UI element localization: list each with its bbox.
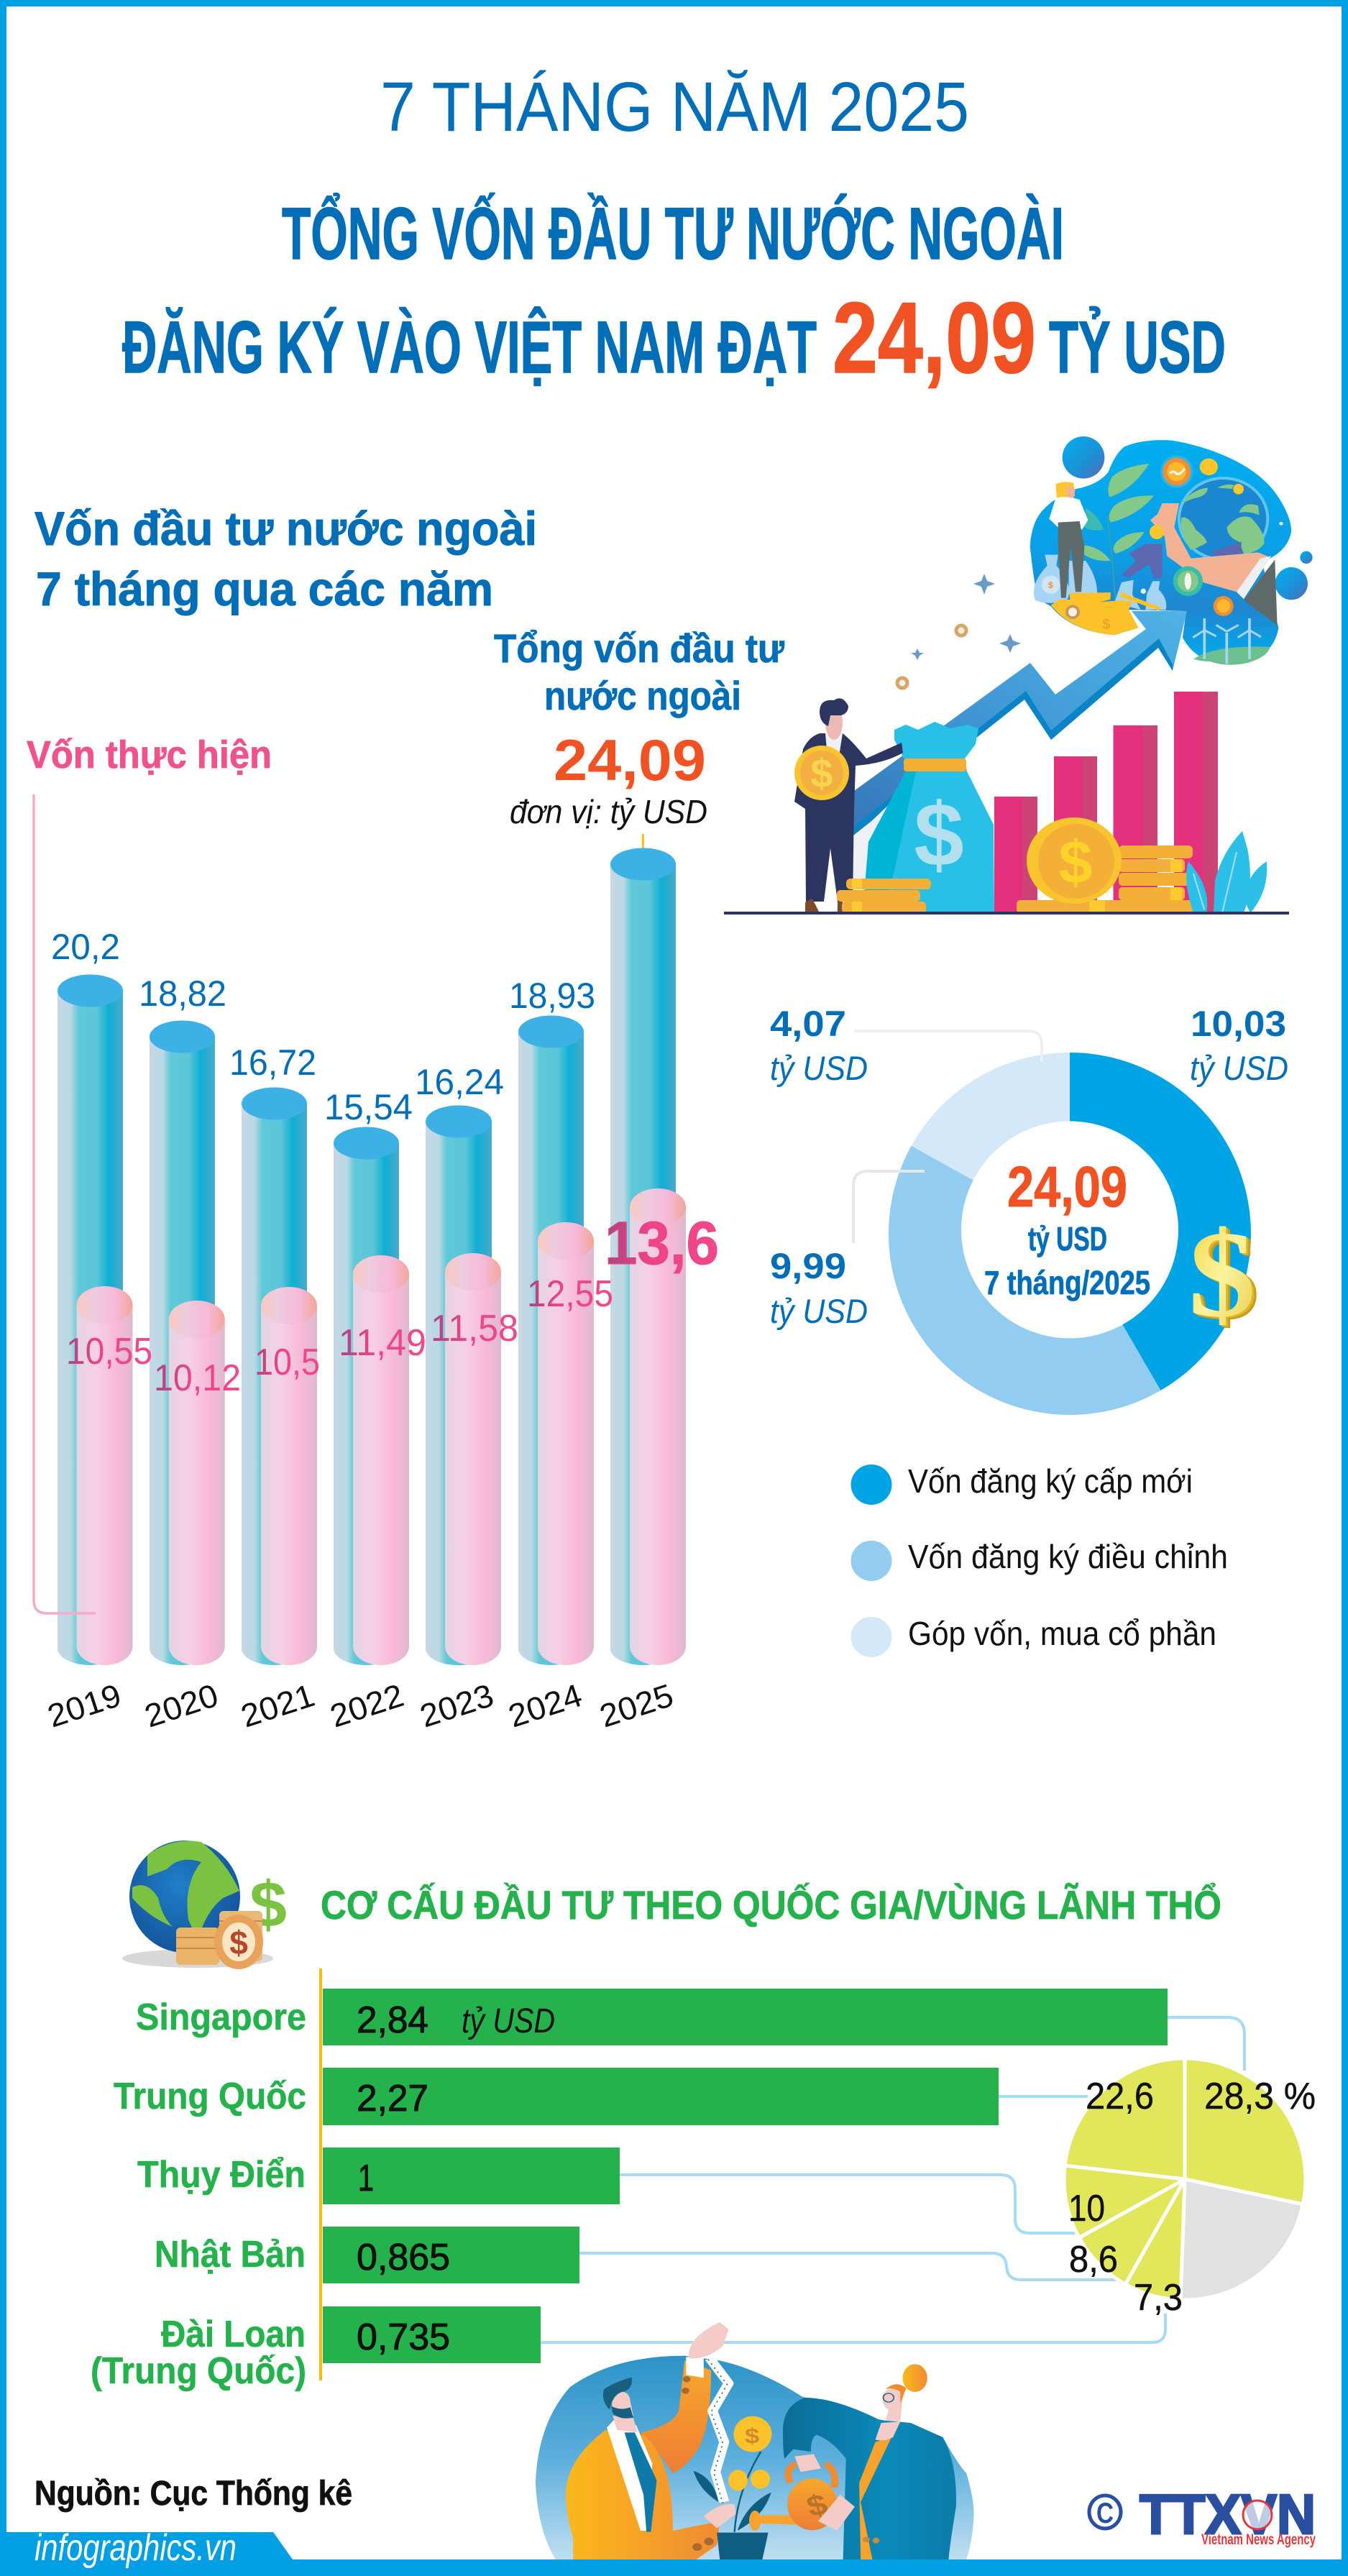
- cylinder 2024 disbursed: [538, 1222, 594, 1665]
- pie labels: 28,3 %: [1204, 2076, 1316, 2117]
- footer band: [0, 2527, 1348, 2576]
- disbursed capital values: 12,55: [527, 1273, 613, 1315]
- segment: adjusted capital: [889, 1146, 1160, 1415]
- donut value labels: 10,03: [1191, 1004, 1286, 1044]
- pie labels: 7,3: [1134, 2277, 1183, 2319]
- disbursed capital values: 10,12: [154, 1357, 241, 1399]
- donut leader lines: [854, 1031, 1042, 1062]
- icon: world investment blob: $: [1048, 580, 1053, 590]
- man body: [566, 2430, 720, 2559]
- legend: [851, 1462, 1228, 1657]
- donut centre total: [984, 1155, 1150, 1301]
- source note: Nguồn: Cục Thống kê: [35, 2475, 352, 2513]
- agency logo: TTXVN: [1140, 2483, 1316, 2546]
- country labels: Nhật Bản: [155, 2234, 306, 2275]
- cylinder 2023 disbursed: [445, 1253, 501, 1665]
- icon: world investment blob: $: [1102, 617, 1110, 633]
- woman on coins: [1055, 482, 1075, 500]
- coin stacks: [837, 817, 1195, 913]
- gold heap: [1051, 592, 1138, 635]
- bar Trung Quoc: [323, 2068, 999, 2125]
- pie labels: 10: [1068, 2188, 1105, 2229]
- cylinder 2020 registered: [150, 1021, 215, 1665]
- pie slice others: [1180, 2179, 1303, 2300]
- cylinder 2022 registered: [334, 1127, 399, 1665]
- money plant: [735, 2452, 761, 2532]
- pie slice Trung Quoc: [1065, 2058, 1185, 2179]
- globe in hand: [1179, 478, 1267, 559]
- pale backdrop: [834, 787, 907, 913]
- pie chart: [1064, 2058, 1306, 2300]
- donut value labels: tỷ USD: [1190, 1049, 1288, 1087]
- pie slice Dai Loan: [1125, 2179, 1185, 2300]
- donut value labels: 4,07: [770, 1004, 846, 1044]
- bar values: 2,84: [357, 1999, 428, 2041]
- agency logo: C: [1096, 2498, 1114, 2529]
- icon: sparkles and rings: [897, 574, 1021, 688]
- bar values: [357, 1999, 555, 2358]
- cylinder 2020 disbursed: [169, 1301, 225, 1665]
- country labels: Trung Quốc: [114, 2076, 306, 2117]
- total capital label: 24,09: [554, 728, 706, 793]
- bar values: 0,865: [357, 2237, 450, 2278]
- woman: [783, 2398, 956, 2559]
- icon: globe with coins: $: [249, 1869, 287, 1941]
- legend: Vốn đăng ký điều chỉnh: [908, 1538, 1228, 1575]
- registered capital values: 18,93: [509, 976, 595, 1016]
- title: [122, 68, 1226, 394]
- pie slice Singapore: [1185, 2058, 1306, 2204]
- country labels: Đài Loan: [161, 2314, 306, 2355]
- registered capital values: 16,72: [229, 1042, 316, 1083]
- cylinder 2021 registered: [242, 1087, 307, 1665]
- plant: [1186, 831, 1267, 913]
- title: 7 THÁNG NĂM 2025: [380, 68, 969, 146]
- pie labels: 22,6: [1086, 2076, 1154, 2117]
- website: infographics.vn: [35, 2527, 237, 2569]
- illustration: businessman, money bag and growth chart: [724, 436, 1313, 915]
- donut value labels: tỷ USD: [770, 1049, 868, 1087]
- money bag: [863, 722, 994, 913]
- year axis labels: 2019: [43, 1677, 126, 1735]
- disbursed capital values: 13,6: [605, 1209, 719, 1277]
- watering can: [788, 2464, 835, 2488]
- cylinder 2021 disbursed: [261, 1287, 317, 1665]
- businessman: [794, 698, 903, 913]
- bar Thuy Dien: [323, 2148, 620, 2204]
- registered capital values: [51, 927, 595, 1127]
- year axis labels: 2021: [237, 1677, 319, 1735]
- icon: globe with coins: $: [229, 1924, 248, 1961]
- donut value labels: 9,99: [770, 1246, 846, 1286]
- heading: capital over years: Vốn đầu tư nước ngoài: [35, 502, 537, 555]
- illustration: investors growing money plant: $: [745, 2424, 760, 2448]
- disbursed capital values: 11,58: [431, 1308, 518, 1349]
- donut value labels: tỷ USD: [770, 1292, 868, 1330]
- donut centre total: tỷ USD: [1028, 1220, 1107, 1257]
- legend: Góp vốn, mua cổ phần: [908, 1615, 1216, 1652]
- wind turbines: [1193, 618, 1261, 664]
- measuring tape: [708, 2358, 728, 2503]
- total capital label: Tổng vốn đầu tư: [494, 625, 784, 671]
- arrow rising: [853, 611, 1187, 835]
- disbursed capital values: 10,5: [255, 1342, 320, 1383]
- bars: [994, 692, 1218, 914]
- pie labels: 8,6: [1069, 2239, 1118, 2281]
- money bag: $: [914, 785, 964, 885]
- bar chart: countries: [91, 1968, 1168, 2392]
- coin stacks: $: [1059, 828, 1092, 896]
- total capital label: nước ngoài: [544, 673, 741, 718]
- pie labels: [1068, 2076, 1316, 2319]
- cylinder 2025 disbursed: [630, 1188, 686, 1665]
- money bags: [1034, 555, 1069, 603]
- disbursed capital values: 11,49: [339, 1322, 426, 1364]
- year axis labels: 2022: [326, 1677, 408, 1735]
- bar Dai Loan: [323, 2306, 541, 2363]
- country labels: Singapore: [136, 1997, 306, 2038]
- cylinder 2019 disbursed: [76, 1286, 132, 1665]
- raised arm: [641, 2360, 711, 2473]
- country labels: (Trung Quốc): [91, 2350, 306, 2392]
- cylinder 2022 disbursed: [353, 1255, 409, 1665]
- registered capital values: 16,24: [415, 1062, 504, 1102]
- title: ĐĂNG KÝ VÀO VIỆT NAM ĐẠT: [122, 306, 817, 388]
- icon: gold dollar: $: [1188, 1206, 1256, 1343]
- icon: gold dollar: $: [1193, 1209, 1260, 1346]
- connector lines: [541, 2017, 1244, 2342]
- registered capital values: 15,54: [324, 1087, 413, 1127]
- year axis labels: 2025: [595, 1677, 678, 1735]
- disbursed capital values: [66, 1209, 719, 1399]
- title: 24,09: [833, 281, 1036, 394]
- disbursed capital values: 10,55: [66, 1331, 152, 1372]
- businessman: $: [810, 751, 833, 796]
- label: disbursed capital: Vốn thực hiện: [27, 733, 272, 776]
- heading: capital over years: [35, 502, 537, 615]
- donut value labels: [770, 1004, 1288, 1330]
- floating coins: [1160, 455, 1193, 488]
- icon: world investment blob: [1030, 436, 1313, 665]
- year axis labels: 2024: [504, 1677, 587, 1735]
- cylinder 2024 registered: [518, 1015, 584, 1665]
- pie slice Nhat Ban: [1079, 2179, 1185, 2284]
- pie slice Thuy Dien: [1064, 2165, 1185, 2237]
- country labels: Thụy Điển: [137, 2154, 306, 2196]
- icon: globe with coins: [122, 1841, 287, 1969]
- year axis labels: 2020: [140, 1677, 223, 1735]
- bar values: 0,735: [357, 2316, 450, 2358]
- bar Singapore: [323, 1989, 1168, 2045]
- bar values: 1: [358, 2158, 374, 2199]
- bar values: tỷ USD: [462, 2002, 555, 2040]
- segment: new registered capital: [1070, 1053, 1251, 1390]
- registered capital values: 20,2: [51, 927, 120, 967]
- year axis labels: [43, 1677, 678, 1735]
- total capital label: [494, 625, 784, 850]
- bar Nhat Ban: [323, 2227, 579, 2283]
- segment: capital contribution: [912, 1053, 1070, 1234]
- donut centre total: 7 tháng/2025: [984, 1264, 1150, 1301]
- icon: gold dollar: $: [1191, 1208, 1258, 1344]
- illustration: investors growing money plant: [536, 2322, 974, 2559]
- heading: structure by country: CƠ CẤU ĐẦU TƯ THEO QUỐC GIA/VÙNG LÃNH THỔ: [321, 1882, 1221, 1928]
- registered capital values: 18,82: [139, 973, 226, 1014]
- cylinder 2025 registered: [610, 848, 676, 1665]
- illustration: investors growing money plant: $: [802, 2488, 832, 2523]
- title: TỶ USD: [1049, 306, 1226, 388]
- donut centre total: 24,09: [1007, 1155, 1127, 1219]
- bar values: 2,27: [357, 2078, 428, 2119]
- cylinder chart: [34, 794, 719, 1735]
- legend: Vốn đăng ký cấp mới: [908, 1462, 1193, 1500]
- country labels: [91, 1997, 306, 2392]
- cylinder 2023 registered: [426, 1106, 492, 1665]
- donut chart: [770, 1004, 1288, 1415]
- total capital label: đơn vị: tỷ USD: [510, 793, 707, 830]
- cylinder 2019 registered: [58, 975, 123, 1665]
- heading: capital over years: 7 tháng qua các năm: [36, 562, 493, 615]
- year axis labels: 2023: [416, 1677, 498, 1735]
